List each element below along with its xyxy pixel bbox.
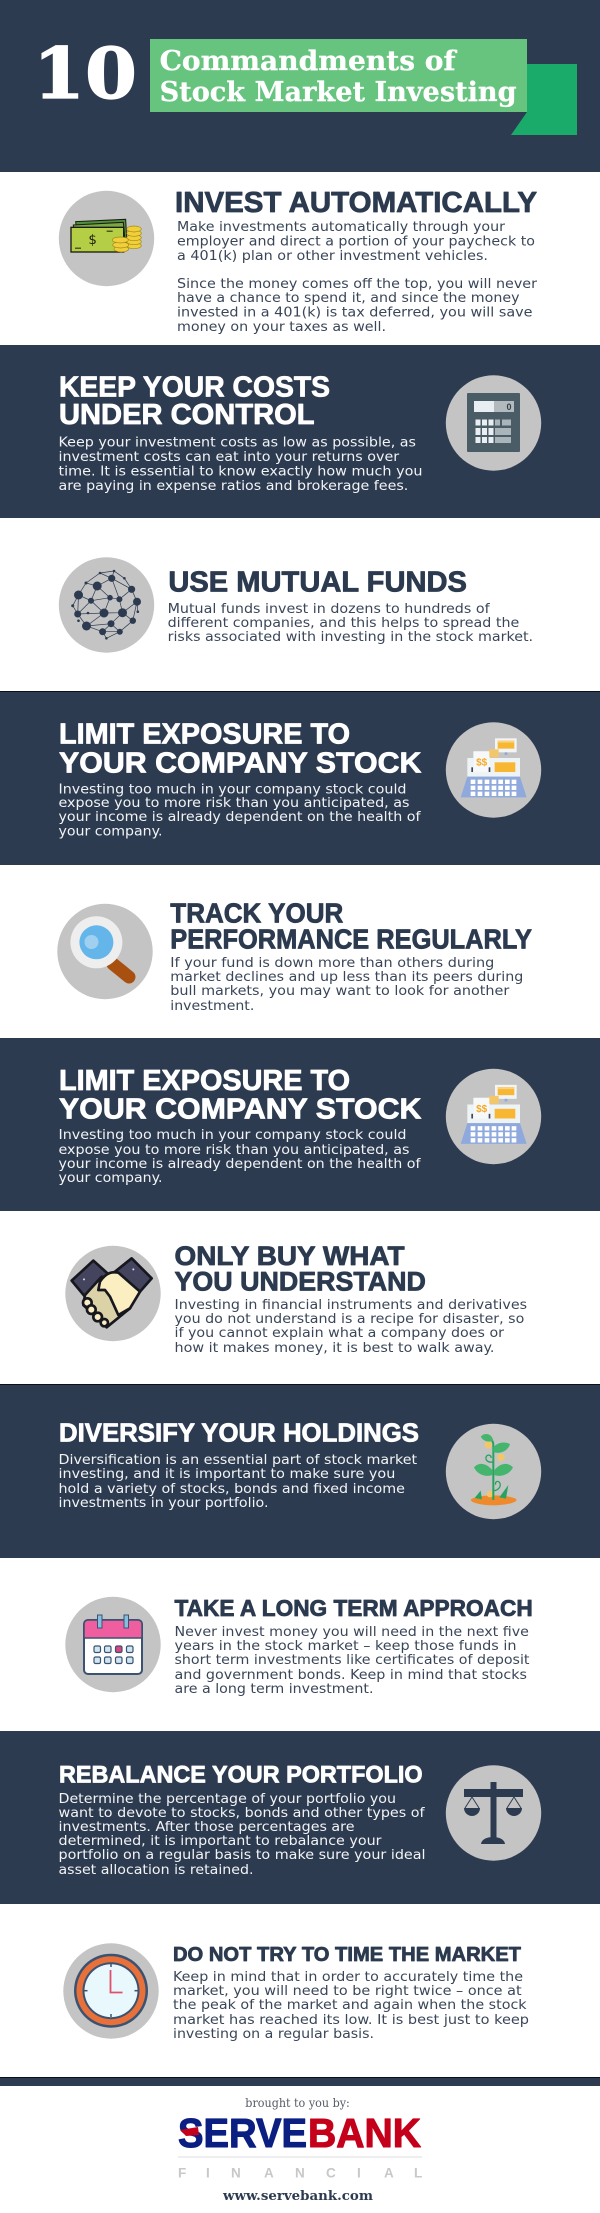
heading: TAKE A LONG TERM APPROACH: [174, 1595, 533, 1621]
body text: how it makes money, it is best to walk away.: [174, 1341, 494, 1356]
body text: the peak of the market and again when the stock: [173, 1998, 527, 2013]
heading: PERFORMANCE REGULARLY: [170, 924, 532, 955]
heading: DO NOT TRY TO TIME THE MARKET: [173, 1943, 521, 1966]
body text: bull markets, you may want to look for another: [170, 984, 510, 999]
body text: your income is already dependent on the health of: [58, 810, 421, 825]
body text: [177, 220, 538, 335]
panel: take a long term approach: [0, 1558, 600, 1731]
body text: investments in your portfolio.: [58, 1496, 268, 1511]
body text: are paying in expense ratios and brokerage fees.: [58, 479, 408, 494]
heading: ONLY BUY WHAT: [174, 1241, 404, 1271]
heading: KEEP YOUR COSTS: [59, 372, 330, 404]
body text: [170, 956, 523, 1014]
body text: market declines and up less than its peers during: [170, 970, 523, 985]
body text: short term investments like certificates of deposit: [174, 1653, 530, 1668]
icon: cash register: [446, 722, 541, 818]
logo: Servebank Financial: BANK: [308, 2110, 421, 2156]
heading: [170, 898, 532, 955]
body text: Determine the percentage of your portfolio you: [58, 1792, 396, 1807]
body text: expose you to more risk than you anticipated, as: [58, 796, 410, 811]
icon: cash register: $$: [476, 757, 488, 768]
attribution text: brought to you by:: [245, 2095, 350, 2110]
body text: expose you to more risk than you anticipated, as: [58, 1143, 410, 1158]
body text: investing, and it is important to make sure you: [58, 1467, 395, 1482]
panel: limit exposure to your company stock: [0, 691, 600, 865]
body text: Never invest money you will need in the next five: [174, 1625, 529, 1640]
heading: YOUR COMPANY STOCK: [59, 748, 421, 780]
body text: determined, it is important to rebalance your: [58, 1834, 382, 1849]
body text: [58, 1792, 426, 1878]
body text: [174, 1625, 530, 1697]
body text: Mutual funds invest in dozens to hundreds of: [168, 602, 490, 617]
body text: [174, 1298, 527, 1356]
panel: use mutual funds: [0, 518, 600, 691]
heading: YOUR COMPANY STOCK: [59, 1094, 421, 1126]
panel: keep your costs under control: [0, 345, 600, 518]
body text: Investing in financial instruments and derivatives: [174, 1298, 527, 1313]
body text: invested in a 401(k) is tax deferred, you will save: [177, 306, 532, 321]
body text: [168, 602, 533, 645]
body text: years in the stock market – keep those funds in: [174, 1639, 516, 1654]
body text: [58, 1128, 421, 1186]
title: Commandments of: [160, 46, 458, 77]
icon: money and coins: [59, 191, 154, 286]
body text: a 401(k) plan or other investment vehicles.: [177, 249, 488, 264]
body text: [58, 1453, 417, 1511]
icon: calculator: 0: [506, 402, 512, 412]
heading: UNDER CONTROL: [59, 399, 315, 431]
heading: LIMIT EXPOSURE TO: [59, 1065, 350, 1097]
panel: track your performance regularly: [0, 865, 600, 1038]
body text: market has reached its low. It is best just to keep: [173, 2013, 529, 2028]
header banner: [0, 0, 600, 172]
icon: magnifying glass: [57, 904, 153, 999]
heading: [59, 718, 421, 780]
panel: diversify your holdings: [0, 1384, 600, 1558]
body text: investment costs can eat into your returns over: [58, 450, 400, 465]
body text: Investing too much in your company stock could: [58, 1128, 406, 1143]
logo: Servebank Financial: SERVE: [178, 2110, 307, 2156]
body text: money on your taxes as well.: [177, 320, 386, 335]
heading: [59, 1065, 421, 1126]
ribbon back fold: [511, 64, 577, 135]
body text: your company.: [58, 825, 162, 840]
logo: Servebank Financial: FINANCIAL: [178, 2166, 422, 2180]
body text: [58, 782, 421, 840]
icon: cash register: $$: [476, 1104, 488, 1115]
title: [160, 46, 517, 108]
body text: your income is already dependent on the health of: [58, 1157, 421, 1172]
body text: Keep your investment costs as low as possible, as: [58, 436, 416, 451]
logo: Servebank Financial: [178, 2110, 422, 2180]
panel: rebalance your portfolio: [0, 1731, 600, 1904]
icon: handshake: [65, 1246, 161, 1341]
website: www.servebank.com: [222, 2189, 373, 2204]
body text: risks associated with investing in the stock market.: [168, 630, 533, 645]
body text: [58, 436, 423, 494]
body text: investment.: [170, 999, 254, 1014]
body text: Investing too much in your company stock could: [58, 782, 406, 797]
body text: portfolio on a regular basis to make sure your ideal: [58, 1848, 426, 1863]
body text: your company.: [58, 1171, 162, 1186]
heading: DIVERSIFY YOUR HOLDINGS: [59, 1418, 419, 1448]
panel: limit exposure to your company stock, repeated: [0, 1038, 600, 1211]
heading: YOU UNDERSTAND: [174, 1267, 426, 1297]
body text: are a long term investment.: [174, 1682, 374, 1697]
body text: Keep in mind that in order to accurately time the: [173, 1970, 523, 1985]
body text: investments. After those percentages are: [58, 1820, 354, 1835]
body text: hold a variety of stocks, bonds and fixed income: [58, 1482, 405, 1497]
heading: [59, 372, 330, 431]
body text: Diversification is an essential part of stock market: [58, 1453, 417, 1468]
icon: balance scales: [446, 1765, 541, 1861]
body text: market, you will need to be right twice – once at: [173, 1984, 522, 1999]
body text: if you cannot explain what a company does or: [174, 1326, 505, 1341]
body text: investing on a regular basis.: [173, 2027, 374, 2042]
heading: LIMIT EXPOSURE TO: [59, 718, 350, 750]
heading: INVEST AUTOMATICALLY: [175, 187, 537, 219]
body text: have a chance to spend it, and since the money: [177, 291, 520, 306]
panel: only buy what you understand: [0, 1211, 600, 1384]
icon: money and coins: $: [88, 233, 97, 248]
body text: you do not understand is a recipe for disaster, so: [174, 1312, 524, 1327]
heading: REBALANCE YOUR PORTFOLIO: [59, 1762, 423, 1789]
icon: network globe: [59, 557, 154, 653]
heading: USE MUTUAL FUNDS: [168, 567, 467, 599]
icon: cash register: [446, 1069, 541, 1164]
icon: calculator: [446, 375, 541, 471]
body text: time. It is essential to know exactly how much you: [58, 465, 423, 480]
heading: [174, 1241, 426, 1297]
heading: TRACK YOUR: [170, 898, 343, 929]
title: Stock Market Investing: [160, 77, 517, 108]
body text: Make investments automatically through your: [177, 220, 506, 235]
body text: want to devote to stocks, bonds and other types of: [58, 1806, 425, 1821]
body text: asset allocation is retained.: [58, 1863, 253, 1878]
panel: do not try to time the market: [0, 1904, 600, 2077]
footer divider band: [0, 2077, 600, 2086]
body text: different companies, and this helps to spread the: [168, 616, 519, 631]
number 10: 10: [33, 32, 137, 115]
body text: Since the money comes off the top, you will never: [177, 277, 538, 292]
body text: and government bonds. Keep in mind that stocks: [174, 1668, 527, 1683]
ribbon front: [150, 39, 527, 112]
body text: [173, 1970, 529, 2042]
icon: calendar: [65, 1597, 161, 1692]
panel: invest automatically: [0, 172, 600, 345]
body text: employer and direct a portion of your paycheck to: [177, 234, 535, 249]
icon: clock: [63, 1943, 159, 2039]
footer: [178, 2095, 422, 2204]
icon: growing plant: [446, 1424, 541, 1519]
body text: If your fund is down more than others during: [170, 956, 494, 971]
